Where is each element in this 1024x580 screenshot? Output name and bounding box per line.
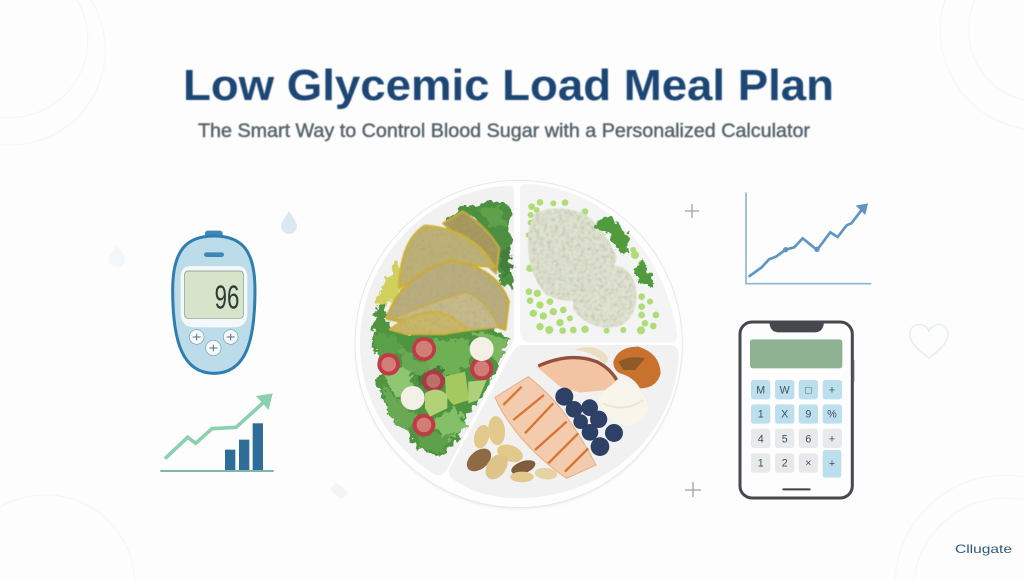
food: dried apricot xyxy=(613,347,661,388)
bars xyxy=(225,423,263,470)
trend line xyxy=(749,210,862,277)
green arrow line xyxy=(165,393,273,459)
glucose meter xyxy=(173,231,255,373)
phone body xyxy=(740,322,852,498)
icon: faint water drop xyxy=(109,246,125,267)
side button xyxy=(853,360,854,382)
food: salad leaves xyxy=(372,303,510,457)
food: yogurt dollop xyxy=(598,380,648,427)
blue line chart xyxy=(746,193,871,284)
brand label: Cllugate xyxy=(955,542,1012,556)
keypad rows: 9 xyxy=(805,409,811,421)
food: mozzarella balls xyxy=(401,337,494,410)
plate with three compartments xyxy=(355,180,682,509)
calculator screen xyxy=(750,339,842,368)
axes xyxy=(746,193,871,284)
icon: plus bottom xyxy=(685,482,701,497)
keypad rows: 1 xyxy=(758,409,764,421)
keypad rows: W xyxy=(780,384,791,396)
food: herbs behind flatbreads xyxy=(447,200,513,290)
keypad rows: X xyxy=(781,409,788,421)
food: herb sprigs on patties xyxy=(597,217,655,285)
keypad rows: % xyxy=(827,409,837,421)
keypad rows: + xyxy=(829,458,835,470)
calculator phone xyxy=(740,322,854,498)
food: cucumber cubes xyxy=(425,372,487,417)
keypad rows: 5 xyxy=(782,433,788,445)
keypad rows: 6 xyxy=(805,433,811,445)
icon: plus top xyxy=(685,204,699,218)
food: grilled salmon small xyxy=(537,358,617,393)
food: almonds and nuts xyxy=(462,415,558,483)
compartment left xyxy=(360,186,514,476)
title: Low Glycemic Load Meal Plan xyxy=(183,61,834,110)
meter buttons xyxy=(189,330,238,356)
keypad rows: M xyxy=(756,384,765,396)
keypad rows: 1 xyxy=(758,458,764,470)
green trend chart with bars xyxy=(160,393,274,472)
keypad rows: × xyxy=(805,458,811,470)
keypad rows: 2 xyxy=(782,458,788,470)
icon: heart outline xyxy=(910,325,948,358)
compartment top right xyxy=(520,184,677,343)
icon: water drop xyxy=(281,211,297,234)
subtitle: The Smart Way to Control Blood Sugar with a Personalized Calculator xyxy=(198,120,811,142)
keypad rows: □ xyxy=(805,384,812,396)
arrow head xyxy=(856,203,868,215)
food: tomatoes xyxy=(377,337,493,436)
meter screen xyxy=(185,271,243,318)
food: green pea dots xyxy=(526,199,659,334)
data points xyxy=(783,247,820,252)
food: yellow lettuce xyxy=(375,262,405,307)
icon: faint capsule xyxy=(330,482,348,500)
keypad rows: + xyxy=(829,384,835,396)
plate shadow xyxy=(355,183,682,509)
keypad rows xyxy=(751,380,842,478)
plate rim xyxy=(355,180,682,508)
compartment bottom xyxy=(449,345,679,498)
notch xyxy=(769,322,824,332)
baseline xyxy=(160,470,274,472)
food: cashew xyxy=(575,347,608,364)
keypad rows: 4 xyxy=(758,433,764,445)
meter reading: 96 xyxy=(215,279,239,316)
home bar xyxy=(782,488,811,490)
food: blueberries xyxy=(555,388,623,456)
keypad rows: + xyxy=(829,433,835,445)
food: grain patties xyxy=(528,208,637,328)
food: grilled salmon large xyxy=(495,377,596,478)
food: lentil flatbreads xyxy=(387,211,508,334)
